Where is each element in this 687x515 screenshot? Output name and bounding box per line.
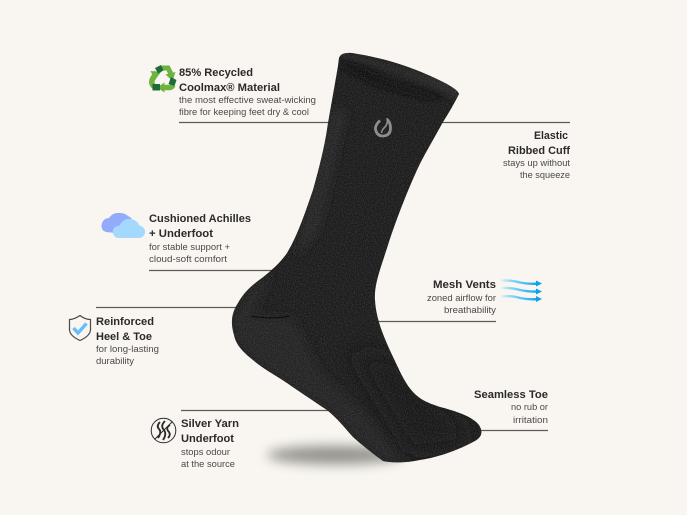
heel seam <box>251 316 290 318</box>
description: for long-lasting <box>96 344 159 354</box>
callout: reinforced heel and toe <box>70 316 159 366</box>
description <box>149 242 230 264</box>
description: the squeeze <box>520 170 570 180</box>
heading: Reinforced <box>96 316 154 328</box>
callout: seamless toe <box>474 389 548 425</box>
heading: Cushioned Achilles <box>149 213 251 225</box>
description <box>181 447 235 469</box>
heading: Elastic <box>534 130 568 142</box>
heading <box>149 213 251 240</box>
description <box>427 293 497 315</box>
foot shade <box>388 348 476 461</box>
description: zoned airflow for <box>427 293 496 303</box>
description <box>503 158 571 180</box>
heading: Underfoot <box>181 433 234 445</box>
cuff rim <box>338 52 459 100</box>
heading: Heel & Toe <box>96 331 152 343</box>
description: fibre for keeping feet dry & cool <box>179 107 309 117</box>
heading <box>508 130 570 157</box>
floor shadow <box>267 446 403 464</box>
description <box>179 95 316 117</box>
heading: Mesh Vents <box>433 279 496 291</box>
heading: Silver Yarn <box>181 418 239 430</box>
description <box>511 402 548 425</box>
callout: elastic cuff <box>503 130 571 180</box>
description <box>96 344 159 366</box>
callout: recycled Coolmax <box>150 65 316 117</box>
description: cloud-soft comfort <box>149 254 228 264</box>
description: for stable support + <box>149 242 230 252</box>
description: no rub or <box>511 402 548 412</box>
description: breathability <box>444 305 497 315</box>
description: durability <box>96 356 135 366</box>
description: stays up without <box>503 158 571 168</box>
heading: Coolmax® Material <box>179 82 280 94</box>
heading: 85% Recycled <box>179 67 253 79</box>
icon: clouds <box>102 213 145 238</box>
description: at the source <box>181 459 235 469</box>
description: stops odour <box>181 447 230 457</box>
shaft highlight <box>299 110 341 238</box>
heading: + Underfoot <box>149 228 213 240</box>
heading <box>96 316 154 343</box>
icon: silver yarn circle <box>151 418 176 443</box>
callout: mesh vents <box>427 279 542 315</box>
description: the most effective sweat-wicking <box>179 95 316 105</box>
heading: Seamless Toe <box>474 389 548 401</box>
cushioned heel panel <box>232 270 410 463</box>
leader lines <box>96 122 570 430</box>
heading <box>181 418 239 445</box>
infographic canvas <box>68 52 570 472</box>
heading <box>179 67 280 94</box>
icon: recycle arrows <box>150 65 176 92</box>
heading: Ribbed Cuff <box>508 145 570 157</box>
cuff inner shadow <box>338 61 445 100</box>
description: irritation <box>513 415 548 425</box>
black sock <box>225 45 490 470</box>
icon: shield check <box>70 316 90 340</box>
sock logo <box>375 118 390 136</box>
callout: silver yarn <box>151 418 239 469</box>
callout: cushioned achilles <box>102 213 251 264</box>
icon: airflow arrows <box>500 280 542 302</box>
